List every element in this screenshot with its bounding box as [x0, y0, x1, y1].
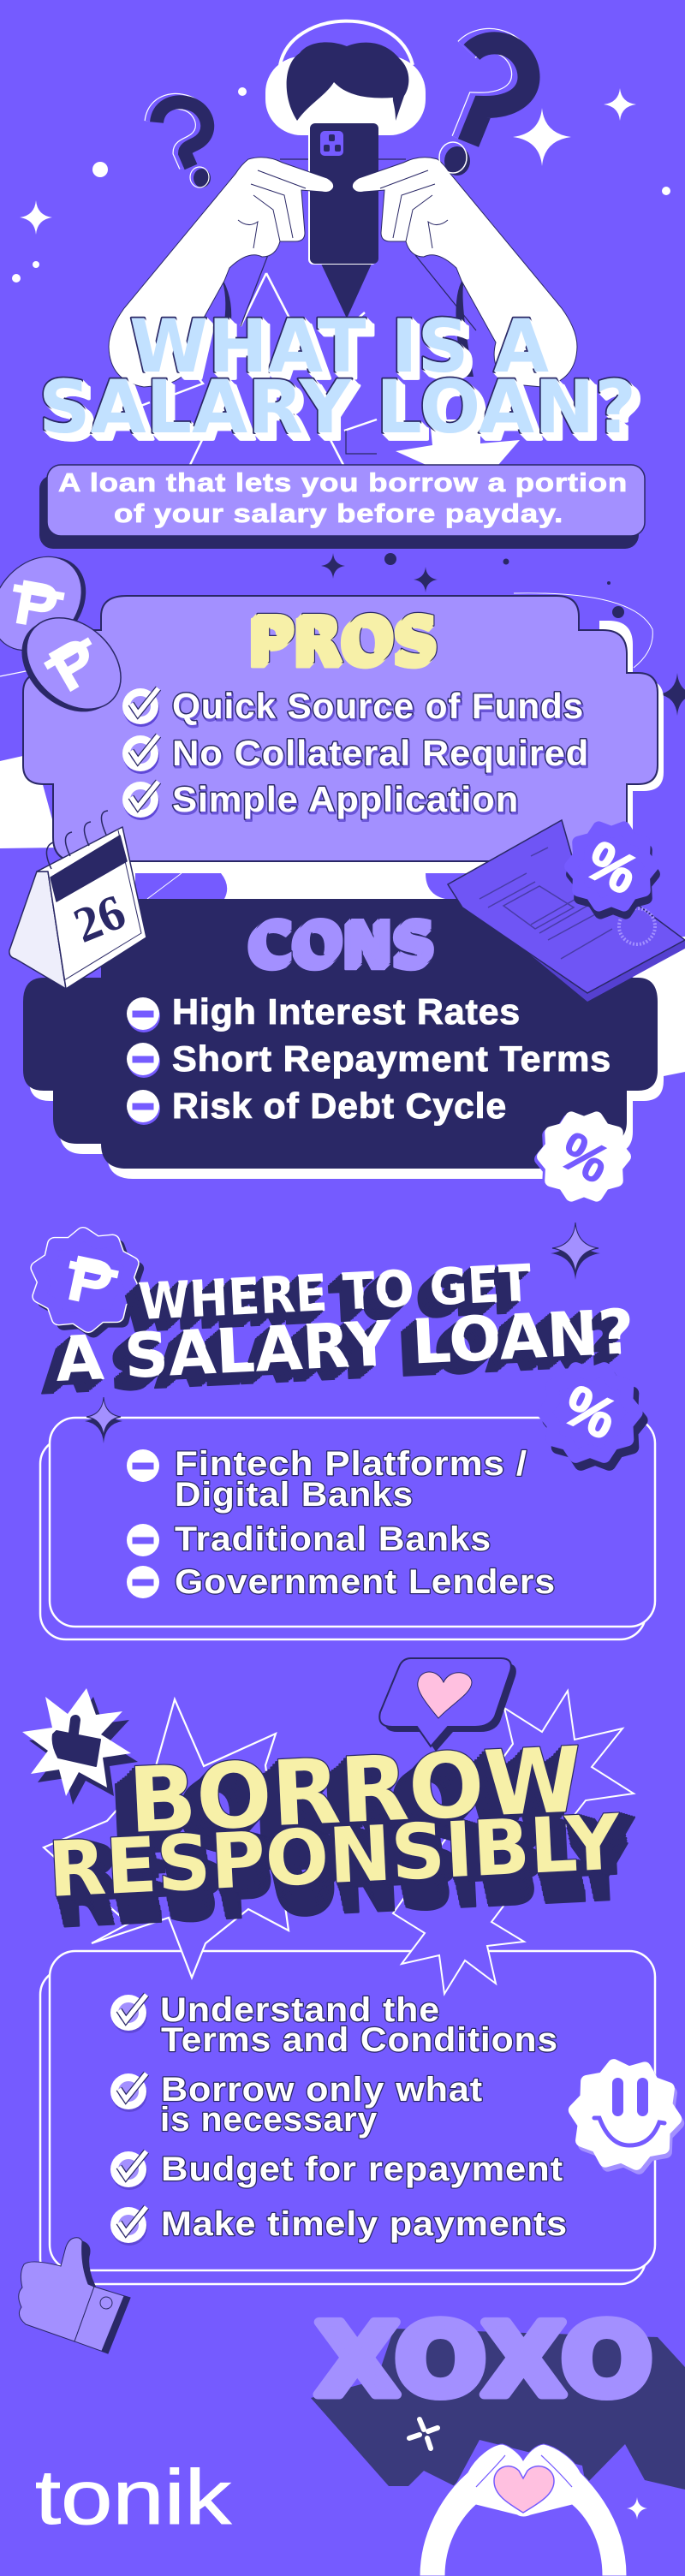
- white coin line: [0, 670, 30, 676]
- badge: percent on document: %: [576, 829, 648, 906]
- pros heading: PROS: [252, 602, 441, 678]
- heart hands: [420, 2444, 627, 2576]
- cons panel body: [23, 899, 658, 1169]
- icon: desk calendar: 26: [66, 883, 133, 954]
- panel: pros: [23, 596, 664, 868]
- sparkle on box: [85, 1397, 122, 1443]
- pros panel body: [23, 596, 658, 861]
- section: borrow responsibly: [19, 1658, 682, 2353]
- item: borrow only: is necessary: [160, 2101, 378, 2139]
- list box front outline: [50, 1418, 655, 1627]
- definition callout: of your salary before payday.: [114, 498, 563, 528]
- title: WHAT IS A: [129, 304, 549, 390]
- list box back outline: [40, 1969, 646, 2284]
- pros item: quick source: Quick Source of Funds: [172, 686, 584, 726]
- panel: cons: [23, 899, 664, 1179]
- coin 2: P: [39, 625, 110, 705]
- item: fintech: Digital Banks: [175, 1476, 414, 1514]
- phone: [308, 123, 378, 265]
- list box back outline: [40, 1438, 646, 1639]
- thumbs up hand: [19, 2238, 130, 2353]
- arrow burst below title: [396, 419, 520, 467]
- item: borrow only: [110, 2071, 483, 2139]
- burst with thumbs up: [22, 1688, 138, 1805]
- right question mark: [439, 40, 529, 176]
- item: government lenders: Government Lenders: [175, 1563, 556, 1601]
- xoxo long shadow: [311, 2329, 685, 2490]
- section: where to get: [26, 1223, 655, 1639]
- sparkle: small: [627, 2497, 647, 2519]
- body thin lines: [241, 159, 476, 454]
- white sparkles and dots: [12, 87, 670, 283]
- pros panel white shadow: [563, 621, 664, 868]
- item: budget: Budget for repayment: [161, 2151, 563, 2188]
- item: understand terms: Understand the: [160, 1991, 440, 2029]
- definition callout: [39, 465, 645, 549]
- badge: white percent: %: [550, 1121, 619, 1195]
- section: xoxo sign-off: [35, 2303, 685, 2576]
- head hair: [287, 42, 408, 121]
- outline burst right: [393, 1691, 634, 1994]
- item: fintech: Fintech Platforms /: [175, 1445, 527, 1483]
- item: borrow only: Borrow only what: [161, 2071, 483, 2109]
- item: understand terms: [110, 1991, 558, 2059]
- heading: borrow responsibly: [46, 1728, 623, 1914]
- badge: peso: P: [63, 1242, 118, 1320]
- cons item: short repayment: Short Repayment Terms: [172, 1038, 611, 1079]
- xoxo letters: XOXO: [316, 2303, 652, 2418]
- sparkle: white cross: [409, 2419, 438, 2448]
- heading: borrow responsibly: BORROW: [126, 1728, 585, 1853]
- list box front outline: [50, 1951, 655, 2270]
- decorative burst lines behind title: [139, 273, 377, 465]
- peso coins: [0, 537, 139, 731]
- item: fintech: [127, 1445, 527, 1514]
- item: timely payments: Make timely payments: [161, 2205, 568, 2243]
- item: understand terms: Terms and Conditions: [161, 2021, 558, 2059]
- headphones: [265, 21, 426, 135]
- tie: [321, 264, 372, 318]
- speech bubble with heart: [379, 1658, 516, 1752]
- section: hero illustration: [12, 21, 670, 467]
- logo: tonik: tonik: [35, 2455, 232, 2541]
- pros item: simple application: Simple Application: [172, 779, 519, 819]
- cons heading: CONS: [252, 907, 438, 978]
- white backdrop shapes: [0, 753, 685, 1079]
- smiley badge: [570, 2062, 682, 2171]
- coin 1: [0, 537, 104, 670]
- heading: where to get a salary loan: [54, 1254, 635, 1395]
- heading: where to get a salary loan: A SALARY LOAN?: [54, 1296, 635, 1395]
- definition callout: A loan that lets you borrow a portion: [58, 467, 628, 497]
- heading: where to get a salary loan: WHERE TO GET: [137, 1254, 533, 1331]
- coin 1: P: [10, 568, 63, 643]
- cons item: high interest: High Interest Rates: [172, 991, 521, 1032]
- title: SALARY LOAN?: [39, 365, 636, 450]
- badge: peso: [26, 1226, 151, 1339]
- title: [39, 304, 636, 450]
- outline burst left: [44, 1699, 289, 1978]
- item: traditional banks: Traditional Banks: [175, 1520, 491, 1558]
- left arm and hand: [109, 158, 334, 387]
- sparkle top right: [551, 1223, 600, 1280]
- cons panel white shadow: [29, 909, 664, 1179]
- badge: percent: %: [554, 1372, 627, 1451]
- coin 2: [3, 598, 139, 731]
- right arm and hand: [352, 158, 577, 387]
- heading: borrow responsibly: RESPONSIBLY: [46, 1797, 623, 1914]
- icon: desk calendar: [9, 811, 146, 989]
- cons item: debt cycle: Risk of Debt Cycle: [172, 1086, 507, 1126]
- left question mark: [152, 101, 211, 187]
- icon: loan document: [448, 820, 685, 1002]
- navy sparkles: [321, 553, 685, 716]
- pros item: no collateral: No Collateral Required: [172, 733, 589, 773]
- badge: percent: [544, 1369, 641, 1464]
